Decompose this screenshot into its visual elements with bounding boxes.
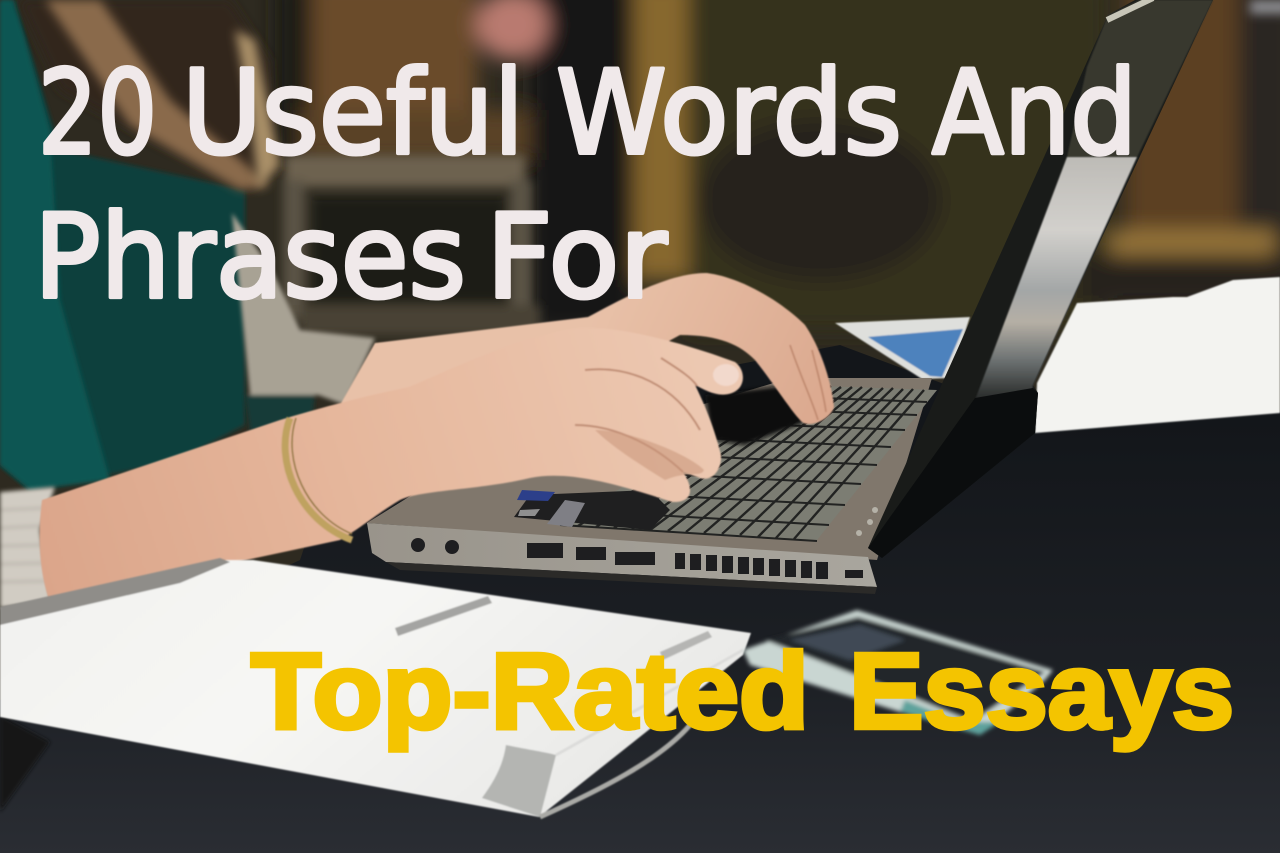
- woman's scarf and hair: [0, 0, 280, 490]
- spine band: [482, 745, 556, 817]
- far-hand finger lines: [790, 345, 826, 420]
- title word: Useful: Useful: [182, 46, 524, 181]
- hands and arms: [40, 273, 834, 602]
- lower-left keys: [514, 490, 670, 530]
- finger shadow: [595, 430, 704, 480]
- dark shadow under fingers: [705, 385, 805, 445]
- far arm and hand: [340, 273, 834, 424]
- gold bracelet: [285, 418, 352, 540]
- subtitle word: Top-Rated: Top-Rated: [251, 630, 809, 751]
- fingernail: [713, 364, 739, 386]
- back cover curve: [540, 725, 690, 817]
- pen: [1107, 0, 1153, 20]
- dark shadow under magazine: [0, 715, 50, 812]
- near arm and hand: [40, 328, 743, 602]
- vent slots: [675, 553, 828, 579]
- title word: And: And: [932, 46, 1137, 181]
- grey sweater sleeve: [0, 213, 375, 608]
- laptop front side: [367, 523, 877, 587]
- title word: Words: Words: [556, 46, 902, 181]
- finger creases: [575, 358, 700, 472]
- deck buttons: [872, 507, 878, 513]
- keyboard: [560, 385, 937, 540]
- title word: 20: 20: [38, 46, 157, 181]
- laptop deck: [367, 378, 932, 560]
- magazine on table: [0, 558, 751, 817]
- subtitle word: Essays: Essays: [849, 630, 1234, 751]
- phone on table: [743, 610, 1053, 735]
- title word: Phrases: Phrases: [34, 190, 466, 325]
- dark table: [0, 345, 1280, 853]
- audio ports: [411, 538, 863, 579]
- lid upper translucent part: [1067, 0, 1213, 157]
- lid reflection: [975, 157, 1137, 400]
- title: white heading: [34, 46, 1137, 325]
- tablet behind laptop: [835, 317, 970, 379]
- laptop lid dark edge: [868, 0, 1213, 558]
- laptop: [367, 0, 1213, 594]
- title word: For: For: [486, 190, 667, 325]
- magazine grey bars: [395, 596, 492, 636]
- papers behind laptop: [1035, 277, 1280, 433]
- usb ports: [527, 543, 655, 565]
- lid hinge: [868, 388, 1038, 558]
- magazine grey edge: [0, 558, 230, 625]
- yellow subtitle: [251, 630, 1234, 751]
